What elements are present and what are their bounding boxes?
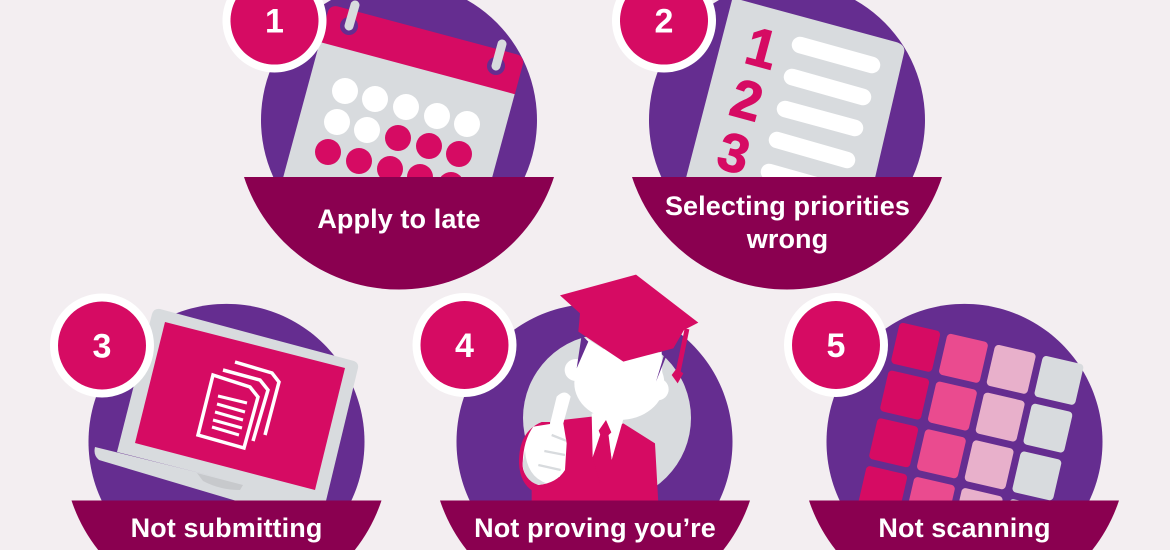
number badge 1 (222, 0, 326, 72)
gown (532, 417, 658, 503)
head (565, 338, 669, 460)
tassel (672, 328, 689, 383)
hair (577, 330, 678, 382)
icon: numbered list (686, 0, 904, 192)
maroon label bowl (632, 177, 942, 290)
number badge 5 (784, 293, 888, 397)
icon: numbered list: 3 (711, 121, 756, 186)
label (665, 191, 910, 254)
purple circle (649, 0, 925, 258)
panel 4: not proving you're (412, 275, 750, 550)
panel 3: not submitting (50, 294, 382, 550)
panel 1: apply too late (222, 0, 554, 290)
thumbs up hand (519, 422, 553, 491)
maroon label bowl (244, 177, 554, 290)
number badge 3 (50, 294, 154, 398)
gray circle backdrop (523, 334, 691, 502)
number badge 3: 3 (93, 328, 111, 366)
number badge 4: 4 (455, 327, 474, 365)
purple circle (261, 0, 537, 258)
icon: numbered list: 1 (739, 16, 784, 81)
maroon label bowl (809, 500, 1119, 550)
number badge 5: 5 (827, 327, 845, 365)
number badge 4 (412, 293, 516, 397)
icon: graduate with thumbs up (519, 275, 698, 503)
label: wrong (746, 224, 828, 254)
icon: numbered list: 2 (724, 68, 769, 133)
label: Apply to late (317, 204, 481, 234)
icon: colour grid (857, 322, 1084, 549)
icon: calendar (283, 4, 525, 198)
tie (593, 420, 612, 483)
panel 5: not scanning (784, 293, 1119, 550)
purple circle (827, 304, 1102, 510)
icon: laptop with documents (94, 309, 358, 520)
purple circle (457, 304, 732, 510)
label: Not submitting (131, 513, 322, 543)
purple circle (88, 304, 365, 510)
maroon label bowl (440, 500, 750, 550)
number badge 2 (612, 0, 716, 72)
maroon label bowl (72, 500, 382, 550)
label: Not scanning (878, 513, 1051, 543)
label: Selecting priorities (665, 191, 910, 221)
number badge 1: 1 (265, 2, 284, 40)
number badge 2: 2 (655, 2, 673, 40)
panel 2: selecting priorities wrong (612, 0, 942, 290)
mortarboard (560, 275, 698, 362)
label: Not proving you’re (474, 513, 716, 543)
